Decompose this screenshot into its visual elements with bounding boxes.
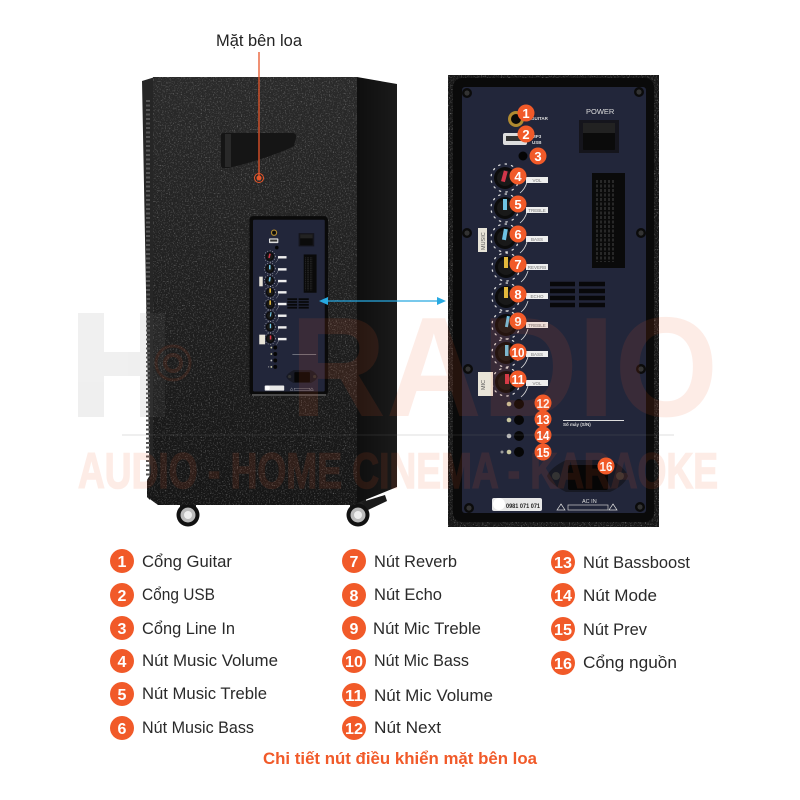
panel labels: Số máy (S/N)	[563, 421, 591, 427]
item 11	[342, 683, 493, 707]
small control panel	[249, 216, 328, 395]
panel labels: ECHO	[530, 294, 544, 299]
item 7	[342, 549, 457, 573]
badge 9	[510, 312, 526, 330]
legend	[110, 549, 690, 740]
panel labels: 0981 071 071	[506, 503, 540, 510]
item 2: 2	[118, 588, 127, 605]
badge 14: 14	[536, 428, 550, 443]
badge 7	[510, 256, 526, 272]
item 12: Nút Next	[374, 719, 441, 737]
item 6: Nút Music Bass	[142, 719, 254, 737]
item 5	[110, 682, 267, 706]
badge 5: 5	[514, 197, 522, 212]
item 12: 12	[345, 721, 363, 738]
item 6: 6	[118, 721, 127, 738]
watermark word RADIO: RADIO	[290, 288, 718, 447]
watermark	[78, 288, 718, 499]
badge 2: 2	[522, 127, 530, 142]
badge 3: 3	[534, 149, 542, 164]
item 15: Nút Prev	[583, 621, 648, 639]
panel labels	[481, 107, 615, 510]
item 16: 16	[554, 656, 572, 673]
panel labels: VOL	[532, 381, 542, 386]
panel screws	[462, 87, 646, 513]
item 11: Nút Mic Volume	[374, 687, 493, 705]
badge 3	[530, 148, 546, 164]
item 14: 14	[554, 588, 572, 605]
item 15: 15	[554, 622, 572, 639]
badge 9: 9	[514, 314, 522, 329]
panel labels: BASS	[531, 352, 543, 357]
badge 16: 16	[600, 459, 612, 474]
item 13	[551, 550, 690, 574]
panel labels: AC IN	[582, 499, 597, 505]
item 14	[551, 583, 657, 607]
item 3	[110, 616, 235, 640]
badge 1: 1	[522, 106, 530, 121]
badge 1	[518, 104, 534, 122]
arrow: double-headed blue zoom link	[319, 297, 446, 305]
item 5: Nút Music Treble	[142, 685, 267, 703]
legend column 1	[110, 549, 278, 740]
item 2: Cổng USB	[142, 586, 215, 604]
item 12	[342, 716, 441, 740]
item 5: 5	[118, 687, 127, 704]
item 8	[342, 583, 442, 607]
carry handle recess	[221, 133, 296, 168]
item 3: Cổng Line In	[142, 620, 235, 638]
badge 6	[510, 226, 526, 242]
badge 7: 7	[514, 257, 522, 272]
item 9: Nút Mic Treble	[373, 620, 481, 638]
speaker cabinet side view	[142, 77, 397, 526]
panel labels: POWER	[586, 107, 615, 116]
item 16	[551, 651, 677, 675]
panel labels: USB	[532, 140, 542, 145]
panel badges	[510, 104, 614, 474]
item 16: Cổng nguồn	[583, 654, 677, 672]
badge 6: 6	[514, 227, 522, 242]
item 10	[342, 649, 469, 673]
badge 4	[510, 168, 526, 184]
legend column 3	[551, 550, 690, 675]
watermark logo H	[78, 313, 165, 417]
item 11: 11	[345, 688, 363, 705]
cabinet texture	[147, 77, 357, 505]
item 1	[110, 549, 233, 573]
side wall of cabinet	[355, 77, 397, 504]
item 13: 13	[554, 555, 572, 572]
item 10: 10	[345, 654, 363, 671]
item 13: Nút Bassboost	[583, 554, 690, 572]
item 15	[551, 617, 648, 641]
item 7: Nút Reverb	[374, 553, 457, 571]
panel labels: VOL	[532, 178, 542, 183]
badge 8	[510, 286, 526, 302]
enlarged control panel	[448, 75, 659, 527]
item 1: Cổng Guitar	[142, 553, 233, 571]
panel frame	[448, 75, 659, 527]
item 8: 8	[350, 588, 359, 605]
bottom caption: Chi tiết nút điều khiển mặt bên loa	[263, 750, 538, 768]
panel labels: MIC	[481, 380, 487, 390]
item 10: Nút Mic Bass	[374, 652, 469, 670]
item 9: 9	[350, 621, 359, 638]
watermark logo ring	[156, 346, 190, 380]
cabinet edge grille	[142, 77, 155, 500]
item 3: 3	[118, 621, 127, 638]
cabinet front face	[147, 77, 357, 505]
item 1: 1	[118, 554, 127, 571]
panel labels: TREBLE	[528, 323, 546, 328]
item 4: 4	[118, 654, 127, 671]
panel labels: MP3	[532, 134, 542, 139]
badge 5	[510, 196, 526, 212]
badge 15: 15	[536, 445, 550, 460]
badge 8: 8	[514, 287, 522, 302]
panel labels: TREBLE	[528, 208, 546, 213]
wheels	[176, 495, 387, 526]
item 8: Nút Echo	[374, 586, 442, 604]
panel labels: MUSIC	[481, 232, 487, 250]
panel labels: GUITAR	[531, 116, 549, 121]
badge 2	[518, 126, 534, 142]
item 4	[110, 649, 278, 673]
small panel shadow	[252, 394, 326, 396]
callout leader line with dot	[254, 52, 264, 182]
item 14: Nút Mode	[583, 587, 657, 605]
badge 10: 10	[512, 345, 524, 360]
item 6	[110, 716, 254, 740]
panel frame texture	[448, 75, 659, 527]
item 9	[342, 616, 481, 640]
item 4: Nút Music Volume	[142, 652, 278, 670]
watermark rule	[122, 434, 674, 436]
panel labels: BASS	[531, 237, 543, 242]
item 2	[110, 583, 215, 607]
legend column 2	[342, 549, 493, 740]
callout label: Mặt bên loa: Mặt bên loa	[216, 32, 303, 50]
item 7: 7	[350, 554, 359, 571]
panel plate and controls	[453, 78, 654, 522]
badge 4: 4	[514, 169, 522, 184]
badge 11: 11	[512, 372, 524, 387]
badge 13: 13	[536, 412, 550, 427]
badge 12: 12	[536, 396, 550, 411]
panel labels: REVERB	[528, 265, 546, 270]
